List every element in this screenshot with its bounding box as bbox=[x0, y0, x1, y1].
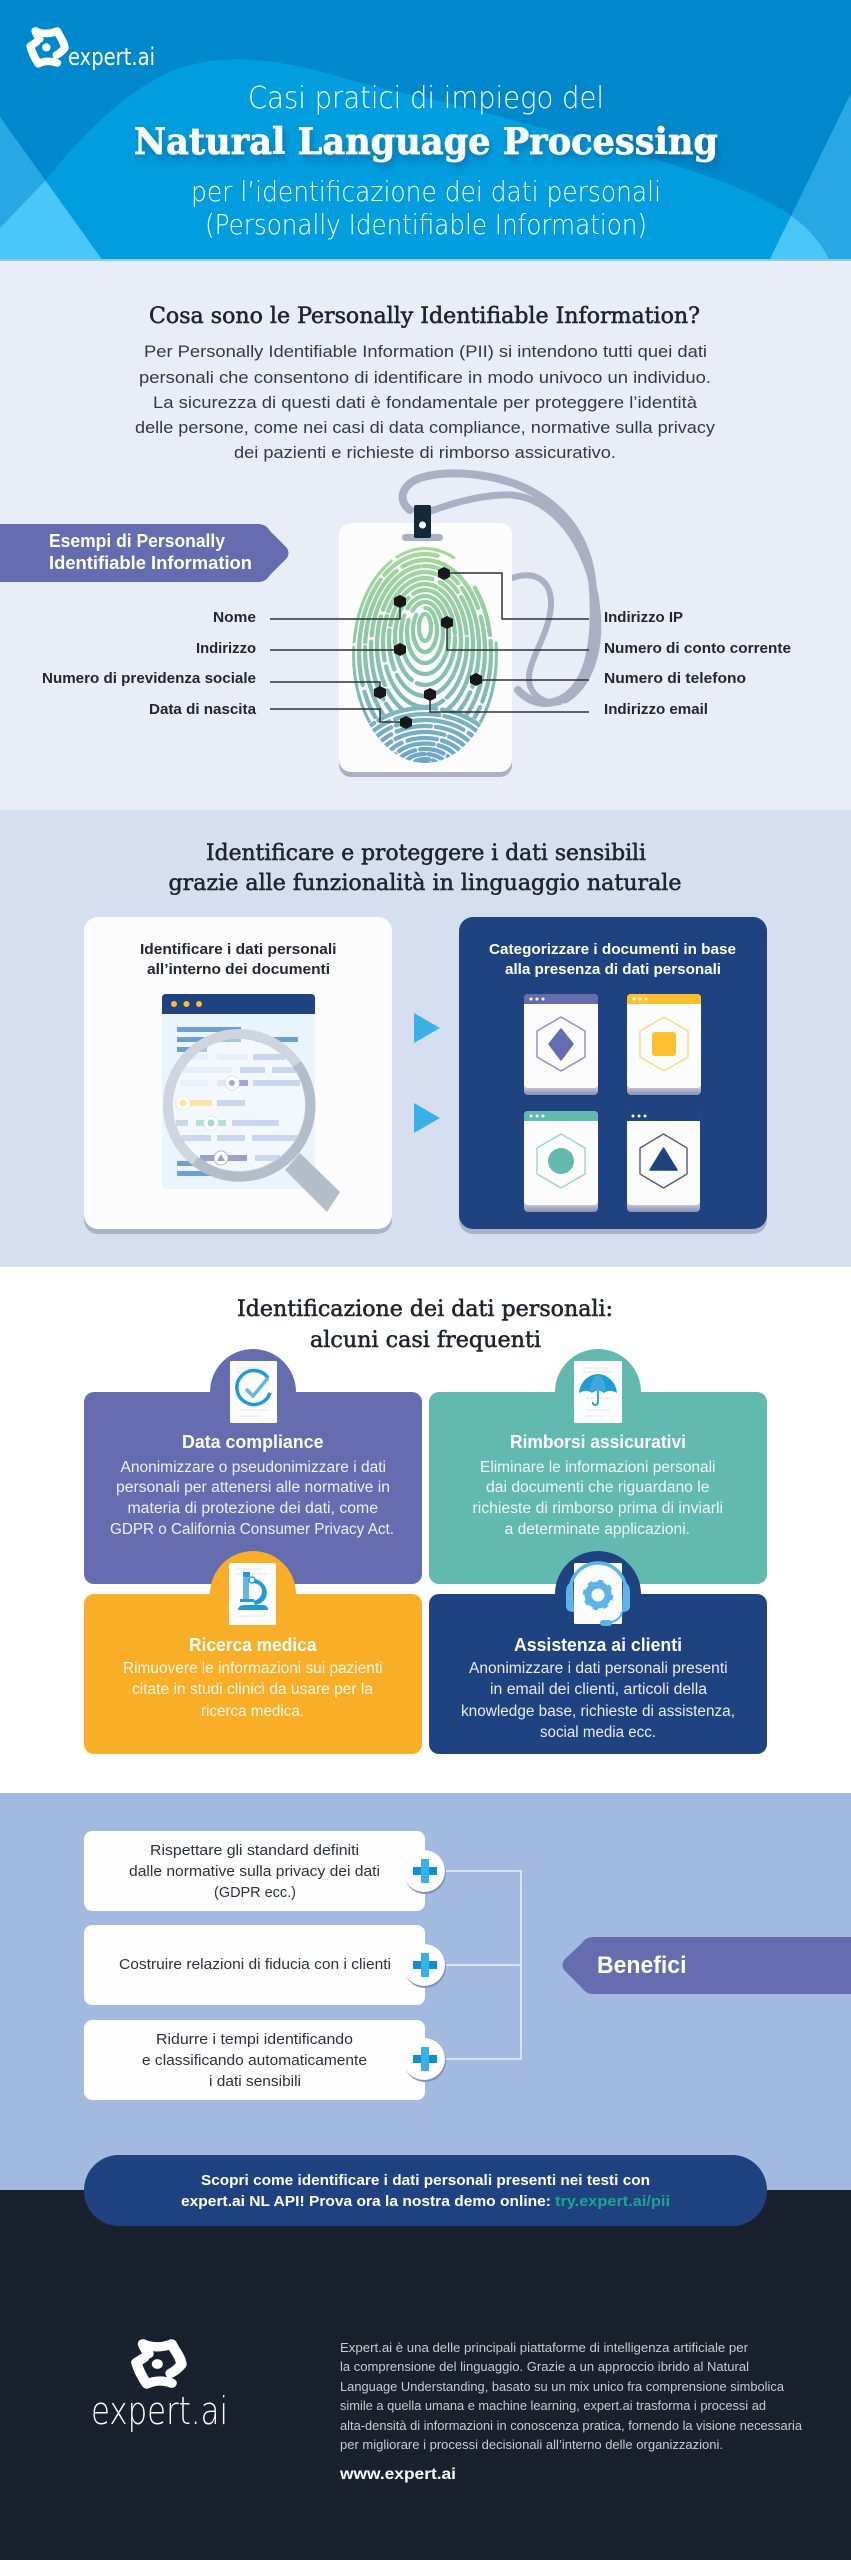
card: Assistenza ai clienti: Anonimizzare i dati personali presenti bbox=[469, 1660, 728, 1677]
banner: Esempi: Identifiable Information bbox=[49, 553, 252, 573]
card: Rimborsi assicurativi: Eliminare le informazioni personali bbox=[480, 1459, 716, 1476]
labels right: Indirizzo email bbox=[604, 701, 708, 718]
panel: categorize documents bbox=[459, 917, 767, 1234]
company description: Language Understanding, basato su un mix unico fra comprensione simbolica bbox=[340, 2379, 785, 2394]
call to action: try.expert.ai/pii bbox=[555, 2193, 670, 2210]
heading: Identificazione dei dati: Identificazione dei dati personali: bbox=[237, 1297, 613, 1322]
benefit box 1: (GDPR ecc.) bbox=[214, 1884, 296, 1901]
title block: (Personally Identifiable Information) bbox=[205, 208, 647, 241]
footer bbox=[0, 2190, 851, 2560]
document: triangle bbox=[627, 1111, 700, 1212]
icon: plus 2 bbox=[403, 1944, 446, 1988]
panel: identify documents bbox=[84, 917, 392, 1234]
heading: Identificare e proteggere: grazie alle funzionalità in linguaggio naturale bbox=[168, 871, 682, 896]
card: Rimborsi assicurativi: dai documenti che riguardano le bbox=[486, 1479, 710, 1496]
card: Rimborsi assicurativi: a determinate applicazioni. bbox=[505, 1521, 690, 1538]
card: Assistenza ai clienti: knowledge base, richieste di assistenza, bbox=[461, 1703, 735, 1720]
heading: Identificazione dei dati: alcuni casi frequenti bbox=[310, 1328, 541, 1353]
logo: expert.ai (header) bbox=[30, 31, 155, 71]
card: Data compliance: materia di protezione dei dati, come bbox=[128, 1500, 378, 1517]
labels left: Numero di previdenza sociale bbox=[42, 670, 256, 687]
card: Assistenza ai clienti: Assistenza ai clienti bbox=[514, 1635, 682, 1655]
section: what is PII bbox=[0, 261, 851, 834]
section: frequent use cases bbox=[0, 1267, 851, 1793]
paragraph: definition: Per Personally Identifiable Information (PII) si intendono tutti quei dati bbox=[144, 342, 707, 361]
card: Assistenza ai clienti bbox=[429, 1551, 767, 1754]
panel: identify documents: Identificare i dati personali bbox=[140, 941, 336, 958]
card: Data compliance bbox=[84, 1349, 422, 1584]
title block: Natural Language Processing bbox=[134, 121, 718, 163]
company description: simile a quella umana e machine learning, expert.ai trasforma i processi ad bbox=[340, 2398, 766, 2413]
icon: umbrella document bbox=[574, 1361, 622, 1423]
icon: microscope document bbox=[229, 1563, 276, 1625]
benefit box 1: dalle normative sulla privacy dei dati bbox=[129, 1863, 380, 1880]
title block bbox=[134, 81, 718, 241]
banner: Benefici bbox=[562, 1937, 851, 1994]
call to action bbox=[84, 2155, 767, 2226]
panel: categorize documents: alla presenza di dati personali bbox=[505, 961, 721, 978]
benefit box 1: Rispettare gli standard definiti bbox=[150, 1842, 359, 1859]
document: circle bbox=[524, 1111, 598, 1212]
icon: headset document bbox=[566, 1563, 630, 1626]
labels right: Numero di conto corrente bbox=[604, 640, 791, 657]
icon: plus 1 bbox=[403, 1850, 446, 1894]
heading: Identificare e proteggere: Identificare e proteggere i dati sensibili bbox=[206, 841, 646, 866]
paragraph: definition bbox=[135, 342, 716, 462]
card: Ricerca medica: ricerca medica. bbox=[201, 1703, 304, 1720]
paragraph: definition: dei pazienti e richieste di rimborso assicurativo. bbox=[234, 443, 616, 462]
labels left: Indirizzo bbox=[196, 640, 256, 657]
card: Assistenza ai clienti: social media ecc. bbox=[540, 1724, 656, 1741]
labels left: Nome bbox=[213, 609, 256, 626]
benefit box 3: i dati sensibili bbox=[209, 2073, 301, 2090]
card: Data compliance: personali per attenersi alle normative in bbox=[116, 1479, 390, 1496]
heading: Cosa sono: Cosa sono le Personally Identifiable Information? bbox=[149, 304, 700, 329]
labels right: Indirizzo IP bbox=[604, 609, 683, 626]
fingerprint bbox=[352, 547, 498, 763]
benefit box 1 bbox=[84, 1831, 425, 1911]
banner: Esempi: Esempi di Personally bbox=[49, 531, 225, 551]
card: Rimborsi assicurativi: Rimborsi assicurativi bbox=[510, 1432, 686, 1452]
card: Ricerca medica bbox=[84, 1551, 422, 1754]
card: Data compliance: GDPR o California Consumer Privacy Act. bbox=[110, 1521, 394, 1538]
section: identify and protect bbox=[0, 810, 851, 1267]
benefit box 2: Costruire relazioni di fiducia con i clienti bbox=[119, 1956, 391, 1973]
connector bracket bbox=[446, 1871, 521, 2059]
benefit box 3: Ridurre i tempi identificando bbox=[156, 2031, 353, 2048]
card: Ricerca medica: citate in studi clinici da usare per la bbox=[132, 1681, 373, 1698]
document: square bbox=[627, 994, 701, 1095]
company description: alta-densità di informazioni in conoscenza pratica, fornendo la visione necessaria bbox=[340, 2418, 803, 2433]
icon: plus 3 bbox=[403, 2038, 446, 2082]
card: Assistenza ai clienti: in email dei clienti, articoli della bbox=[490, 1681, 707, 1698]
lanyard bbox=[403, 473, 598, 703]
arrows bbox=[414, 1013, 440, 1133]
icon: magnifying glass bbox=[168, 1034, 340, 1212]
benefit box 2 bbox=[84, 1925, 425, 2005]
website: www.expert.ai bbox=[339, 2466, 456, 2483]
company description: la comprensione del linguaggio. Grazie a un approccio ibrido al Natural bbox=[340, 2359, 749, 2374]
icon: check document bbox=[230, 1361, 277, 1423]
document window bbox=[162, 994, 315, 1189]
paragraph: definition: delle persone, come nei casi di data compliance, normative sulla privacy bbox=[135, 418, 716, 437]
card: Data compliance: Anonimizzare o pseudonimizzare i dati bbox=[120, 1459, 386, 1476]
section: benefits bbox=[0, 1793, 851, 2190]
paragraph: definition: personali che consentono di identificare in modo univoco un individuo. bbox=[139, 368, 711, 387]
call to action: expert.ai NL API! Prova ora la nostra demo online: bbox=[181, 2193, 551, 2210]
labels right: Numero di telefono bbox=[604, 670, 746, 687]
banner: Benefici: Benefici bbox=[597, 1952, 686, 1979]
labels left: Data di nascita bbox=[149, 701, 257, 718]
paragraph: definition: La sicurezza di questi dati è fondamentale per proteggere l’identità bbox=[153, 393, 698, 412]
document: diamond bbox=[524, 994, 598, 1095]
benefit box 3 bbox=[84, 2020, 425, 2100]
benefit box 3: e classificando automaticamente bbox=[142, 2052, 367, 2069]
card: Ricerca medica: Rimuovere le informazioni sui pazienti bbox=[123, 1660, 383, 1677]
labels right bbox=[604, 609, 791, 718]
labels left bbox=[42, 609, 257, 718]
company description: per migliorare i processi decisionali all’interno delle organizzazioni. bbox=[340, 2437, 723, 2452]
header banner bbox=[0, 0, 851, 261]
panel: categorize documents: Categorizzare i documenti in base bbox=[489, 941, 736, 958]
logo: expert.ai (footer): expert.ai bbox=[91, 2389, 228, 2433]
title block: Casi pratici di impiego del bbox=[248, 81, 604, 116]
card: Ricerca medica: Ricerca medica bbox=[189, 1635, 317, 1655]
card: Data compliance: Data compliance bbox=[182, 1432, 324, 1452]
logo: expert.ai (footer) bbox=[91, 2344, 228, 2433]
connector lines and markers bbox=[270, 567, 589, 729]
card: Rimborsi assicurativi bbox=[429, 1349, 767, 1584]
call to action: Scopri come identificare i dati personali presenti nei testi con bbox=[201, 2172, 650, 2189]
logo: expert.ai (header): expert.ai bbox=[68, 43, 155, 71]
ID badge bbox=[339, 505, 512, 777]
heading: Identificazione dei dati bbox=[237, 1297, 613, 1353]
heading: Identificare e proteggere bbox=[168, 841, 682, 896]
company description bbox=[340, 2340, 803, 2452]
card: Rimborsi assicurativi: richieste di rimborso prima di inviarli bbox=[472, 1500, 723, 1517]
company description: Expert.ai è una delle principali piattaforme di intelligenza artificiale per bbox=[340, 2340, 749, 2355]
banner: Esempi bbox=[0, 524, 288, 582]
title block: per l’identificazione dei dati personali bbox=[191, 175, 661, 208]
panel: identify documents: all’interno dei documenti bbox=[147, 961, 330, 978]
